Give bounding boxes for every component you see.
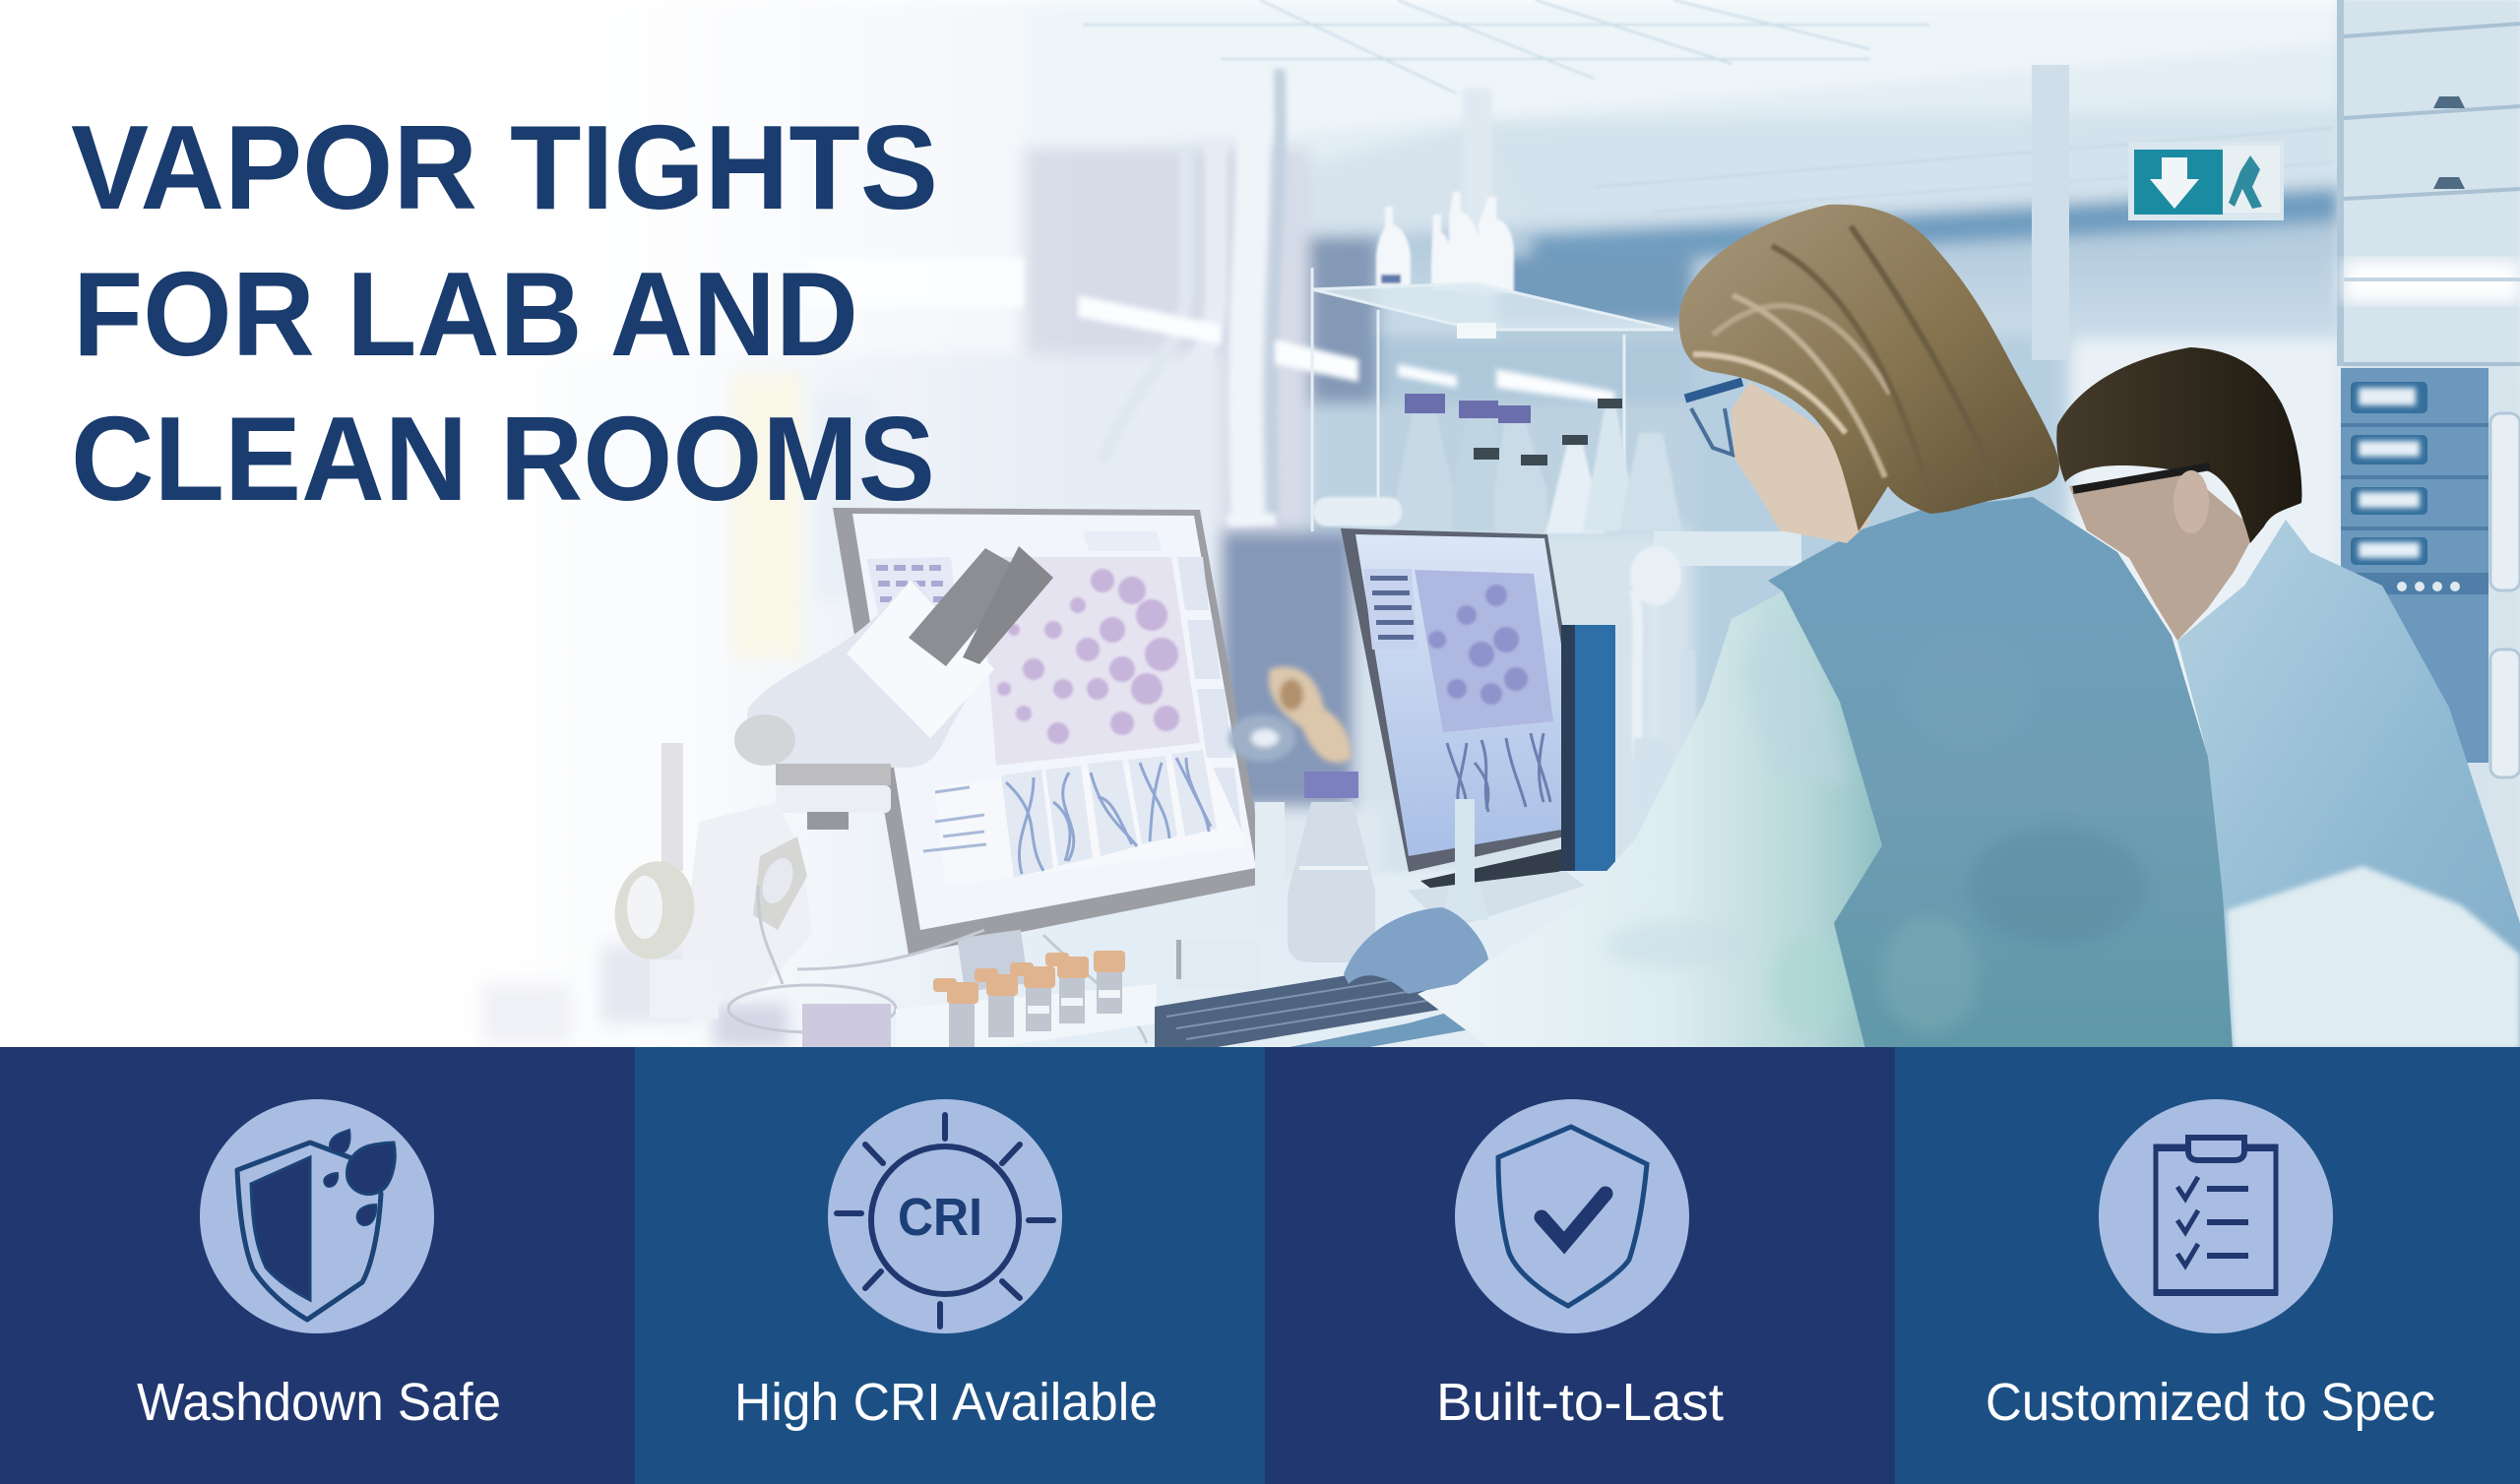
label: Washdown Safe — [137, 1373, 501, 1432]
ceiling column — [2032, 65, 2069, 360]
label: Built-to-Last — [1436, 1373, 1724, 1432]
faint background objects on the left — [482, 374, 876, 1047]
icon: CRI light: CRI — [898, 1188, 982, 1247]
panel: customized to spec — [1895, 1047, 2520, 1484]
panel: built-to-last — [1265, 1047, 1895, 1484]
woman: sleeve shading — [1605, 610, 1851, 1033]
title: CLEAN ROOMS — [71, 392, 935, 526]
woman: glasses — [1685, 382, 1742, 455]
woman: neck and face — [1732, 382, 1870, 543]
woman: lab coat sleeve — [1418, 591, 1882, 1049]
woman: hair — [1679, 205, 2059, 531]
top shelf bottles — [1376, 192, 1514, 293]
woman: blue lab coat back — [1768, 497, 2233, 1049]
right wall cabinets — [2337, 0, 2520, 366]
man: neck and face — [2069, 469, 2256, 641]
acrylic shelf — [1312, 268, 1673, 531]
gloved hand — [1344, 907, 1488, 994]
monitor right — [1341, 528, 1596, 872]
wall equipment right of monitor — [1630, 546, 1695, 846]
blue binder — [1561, 625, 1615, 871]
woman: hair strands — [1693, 226, 1998, 492]
desk surface — [689, 856, 1673, 1049]
dark monitor stand — [1420, 849, 1561, 900]
dna strips on right monitor — [1447, 733, 1550, 812]
blurred hand-shaped object — [1228, 666, 1352, 763]
gel panel on monitor — [866, 557, 957, 613]
lab glassware on lower shelf — [1313, 394, 1801, 566]
icon: clipboard checklist — [2099, 1099, 2333, 1333]
dna strips on monitor — [935, 750, 1248, 886]
glass beaker and cable — [728, 886, 1147, 1043]
blue equipment drawers — [2341, 368, 2520, 777]
keyboard — [1155, 965, 1486, 1049]
monitor left — [833, 508, 1268, 992]
panel: washdown safe — [0, 1047, 635, 1484]
sample vials with orange caps — [802, 951, 1157, 1049]
man: glasses — [2073, 466, 2210, 490]
test tube on desk — [1443, 799, 1488, 920]
man: lab coat — [2177, 520, 2520, 1049]
title: FOR LAB AND — [73, 247, 858, 381]
light reflections — [807, 258, 1614, 403]
cell image on right monitor — [1415, 570, 1553, 732]
icon: shield with water drops — [200, 1099, 434, 1333]
microscope — [607, 546, 1053, 1019]
icon: CRI light — [828, 1099, 1062, 1333]
man: ear — [2174, 470, 2209, 533]
title: VAPOR TIGHTS — [71, 100, 938, 234]
photo: scientists in a laboratory — [482, 0, 2520, 1047]
man: hair — [2056, 347, 2301, 543]
label: High CRI Available — [734, 1373, 1158, 1432]
room background — [0, 0, 2520, 1053]
white fade overlay — [0, 0, 2520, 1049]
central glass bottle — [1176, 772, 1375, 989]
cell image on monitor — [979, 557, 1200, 766]
woman: coat shading — [1880, 630, 2146, 1033]
panel: high CRI available — [635, 1047, 1265, 1484]
ventilation pipes — [1102, 69, 1492, 526]
side data strip on monitor — [1177, 557, 1242, 841]
exit sign — [2128, 142, 2284, 220]
label: Customized to Spec — [1985, 1373, 2435, 1432]
title — [71, 100, 938, 526]
man: white lower sleeve — [2227, 866, 2520, 1049]
white stand foot — [1408, 871, 1585, 930]
icon: shield with check mark — [1455, 1099, 1689, 1333]
ceiling slats — [1083, 0, 2333, 212]
